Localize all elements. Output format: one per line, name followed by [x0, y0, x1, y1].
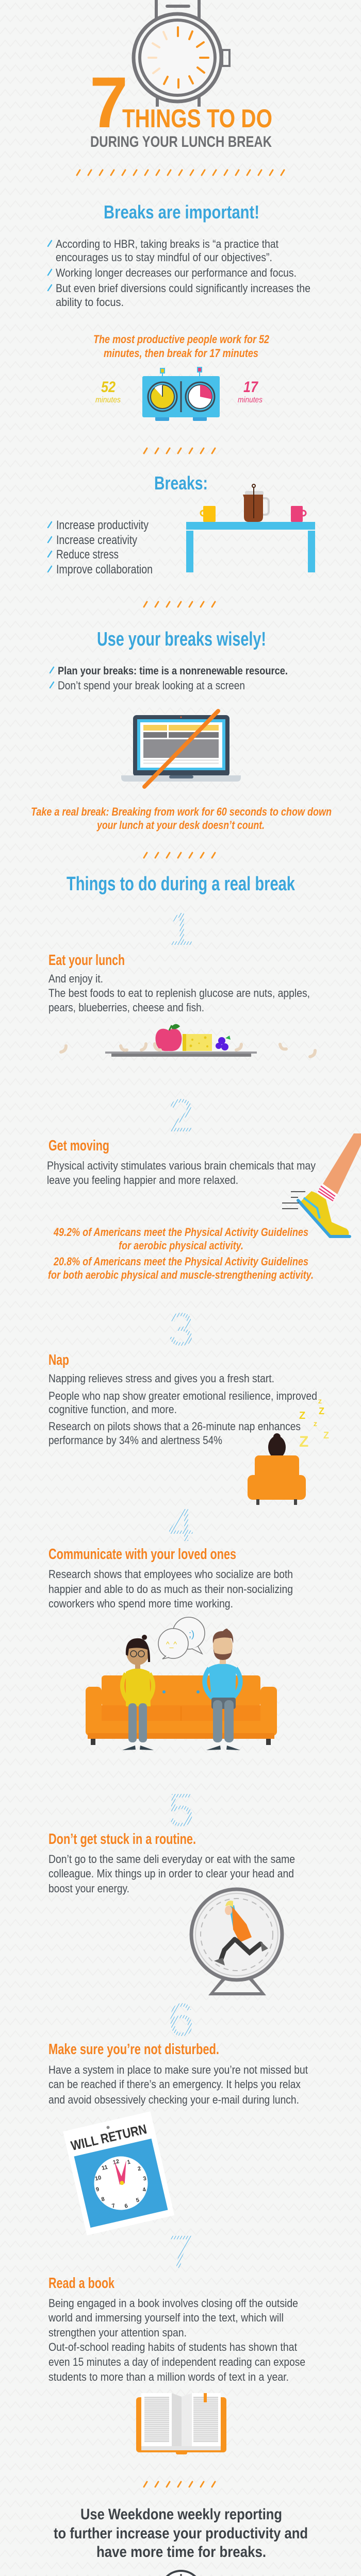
number 4: 4: [168, 1500, 194, 1551]
section 2: get moving: leave you feeling happier and more relaxed.: [47, 1174, 238, 1187]
closing message: [54, 2506, 308, 2561]
section 6: not disturbed: [48, 2041, 308, 2106]
icon: chess clock with 52 and 17: minutes: [95, 396, 121, 404]
illustration: two people on couch: ;): [189, 1629, 194, 1639]
section 7: read a book: students to more than a million words of text in a year.: [48, 2370, 289, 2383]
speech bubbles: [173, 1617, 205, 1649]
section 7: read a book: even 15 minutes a day of independent reading can expose: [48, 2355, 305, 2368]
section 1: eat your lunch: And enjoy it.: [48, 972, 103, 985]
callout: physical activity stats: for aerobic physical activity.: [119, 1239, 243, 1252]
number 1: 1: [168, 904, 194, 955]
bullet list: benefits: Improve collaboration: [56, 563, 153, 577]
section 5: routine: Don’t go to the same deli everyday or eat with the same: [48, 1853, 295, 1866]
callout: 52/17 minutes: minutes, then break for 17 minutes: [104, 347, 258, 360]
heading: Breaks are important: Breaks are important!: [104, 201, 259, 223]
section 7: read a book: Out-of-school reading habits of students has shown that: [48, 2341, 297, 2353]
icon: will return sign: 2: [137, 2165, 142, 2172]
icon: will return sign: 8: [101, 2196, 105, 2203]
section 7: read a book: strengthen your attention span.: [48, 2326, 187, 2339]
callout: 52/17 minutes: The most productive people work for 52: [93, 333, 270, 346]
section 5: routine: boost your energy.: [48, 1882, 129, 1895]
number 5: 5: [168, 1785, 194, 1836]
section 3: nap: Nap: [48, 1352, 69, 1368]
illustration: two people on couch: [86, 1617, 277, 1750]
icon: open book: [136, 2393, 226, 2454]
icon: running leg: [282, 1133, 361, 1236]
illustration: two people on couch: ^_^: [166, 1640, 177, 1648]
section 1: eat your lunch: pears, blueberries, cheese and fish.: [48, 1001, 204, 1014]
icon: will return sign: 4: [142, 2187, 147, 2193]
divider slashes: [144, 853, 215, 858]
icon: watch: [134, 0, 229, 107]
bullet list: breaks facts: ability to focus.: [56, 296, 124, 309]
icon: wall clock: [160, 2571, 202, 2576]
callout: take a real break: [31, 805, 332, 832]
woman: [126, 1668, 151, 1706]
icon: chess clock with 52 and 17: 52: [101, 379, 116, 396]
callout: physical activity stats: 20.8% of Americans meet the Physical Activity Guidelines: [53, 1255, 308, 1268]
section 3: nap: Napping relieves stress and gives you a fresh start.: [48, 1372, 274, 1385]
heading: Breaks: Breaks:: [154, 472, 208, 494]
icon: napping person in armchair: Z: [323, 1430, 329, 1440]
title: THINGS TO DO: [122, 104, 272, 133]
icon: will return sign: WILL RETURN: [69, 2121, 148, 2154]
divider slashes: [144, 2482, 215, 2487]
callout: physical activity stats: [48, 1226, 314, 1281]
man: [209, 1664, 236, 1700]
section 1: eat your lunch: [48, 952, 310, 1014]
icon: will return sign: 3: [142, 2175, 147, 2182]
section 4: communicate: Communicate with your loved ones: [48, 1546, 236, 1563]
bullet list: breaks facts: Working longer decreases our performance and focus.: [56, 266, 297, 279]
title: 7: [90, 62, 128, 143]
icon: will return sign: 9: [95, 2186, 100, 2193]
bullet list: breaks facts: [48, 238, 310, 309]
section 7: read a book: Being engaged in a book involves closing off the outside: [48, 2297, 298, 2310]
section 2: get moving: [47, 1138, 316, 1187]
number 6: 6: [168, 1994, 194, 2046]
bullet list: breaks facts: encourages us to stay mindful of our objectives”.: [56, 251, 272, 264]
icon: napping person in armchair: Z: [318, 1399, 322, 1405]
icon: table with mugs and coffee pot: [186, 484, 315, 572]
section 6: not disturbed: Make sure you’re not disturbed.: [48, 2041, 219, 2058]
section 5: routine: [48, 1831, 295, 1895]
bullet list: breaks facts: According to HBR, taking breaks is “a practice that: [56, 238, 278, 250]
icon: will return sign: 12: [112, 2158, 120, 2166]
section 4: communicate: [48, 1546, 293, 1610]
icon: napping person in armchair: [248, 1399, 329, 1505]
closing message: Use Weekdone weekly reporting: [80, 2506, 282, 2523]
bullet list: benefits: Increase productivity: [56, 518, 149, 532]
bullet list: wise breaks: [50, 665, 288, 692]
number 7: 7: [168, 2227, 194, 2278]
section 5: routine: colleague. Mix things up in order to clear your head and: [48, 1867, 294, 1880]
section 7: read a book: world and immersing yourself into the text, which will: [48, 2311, 284, 2324]
section 5: routine: Don’t get stuck in a routine.: [48, 1831, 196, 1848]
bullet list: breaks facts: But even brief diversions could significantly increases the: [56, 282, 310, 295]
bullet list: wise breaks: Plan your breaks: time is a nonrenewable resource.: [58, 665, 288, 677]
section 7: read a book: Read a book: [48, 2275, 115, 2292]
icon: will return sign: [63, 2111, 174, 2235]
icon: will return sign: 11: [101, 2164, 108, 2172]
icon: hamster wheel runner: [191, 1889, 282, 1995]
section 3: nap: Research on pilots shows that a 26-minute nap enhances: [48, 1420, 301, 1433]
section 6: not disturbed: can be reached if there’s an emergency. It helps you relax: [48, 2078, 301, 2091]
section 3: nap: cognitive function, and more.: [48, 1403, 177, 1416]
icon: will return sign: 5: [136, 2197, 140, 2204]
icon: chess clock with 52 and 17: minutes: [238, 396, 262, 404]
icon: will return sign: 6: [124, 2203, 128, 2210]
icon: napping person in armchair: Z: [299, 1410, 305, 1421]
section 1: eat your lunch: Eat your lunch: [48, 952, 125, 969]
icon: will return sign: 7: [111, 2202, 116, 2209]
closing message: to further increase your productivity and: [54, 2525, 308, 2542]
icon: chess clock with 52 and 17: [95, 367, 262, 421]
bullet list: wise breaks: Don’t spend your break looking at a screen: [58, 679, 245, 692]
number 2: 2: [168, 1090, 194, 1142]
section 4: communicate: happier and able to do as much as their non-socializing: [48, 1583, 293, 1596]
icon: chess clock with 52 and 17: 17: [243, 379, 258, 396]
heading: Use your breaks wisely: Use your breaks wisely!: [97, 629, 266, 650]
section 2: get moving: Get moving: [48, 1138, 109, 1154]
divider slashes: [144, 448, 215, 453]
section 6: not disturbed: and avoid obsessively checking your e-mail during lunch.: [48, 2093, 299, 2106]
icon: crossed-out laptop: [121, 711, 241, 787]
bullet list: benefits: Increase creativity: [56, 533, 137, 547]
title: [90, 62, 272, 150]
heading: Things to do during a real break: Things to do during a real break: [67, 873, 296, 895]
section 4: communicate: coworkers who spend more time working.: [48, 1597, 233, 1610]
icon: food tray: [61, 1025, 315, 1057]
section 6: not disturbed: Have a system in place to make sure you’re not missed but: [48, 2063, 308, 2076]
section 3: nap: performance by 34% and alertness 54%: [48, 1434, 222, 1447]
section 3: nap: People who nap show greater emotional resilience, improved: [48, 1389, 317, 1402]
closing message: have more time for breaks.: [96, 2544, 266, 2561]
bullet list: benefits: Reduce stress: [56, 548, 119, 562]
icon: napping person in armchair: Z: [299, 1433, 308, 1450]
callout: take a real break: your lunch at your desk doesn’t count.: [96, 819, 265, 832]
divider slashes: [144, 602, 215, 607]
section 1: eat your lunch: The best foods to eat to replenish glucose are nuts, apples,: [48, 987, 310, 999]
callout: physical activity stats: 49.2% of Americans meet the Physical Activity Guidelines: [53, 1226, 308, 1239]
icon: napping person in armchair: Z: [319, 1406, 324, 1416]
number 3: 3: [168, 1304, 194, 1355]
icon: will return sign: 10: [94, 2175, 102, 2182]
callout: 52/17 minutes: [93, 333, 270, 360]
section 3: nap: [48, 1352, 317, 1447]
icon: napping person in armchair: Z: [314, 1421, 317, 1428]
section 7: read a book: [48, 2275, 305, 2383]
section 4: communicate: Research shows that employees who socialize are both: [48, 1568, 293, 1581]
icon: will return sign: 1: [126, 2159, 131, 2166]
section 2: get moving: Physical activity stimulates various brain chemicals that may: [47, 1159, 316, 1172]
title: DURING YOUR LUNCH BREAK: [90, 133, 272, 150]
divider slashes: [77, 170, 284, 175]
bullet list: benefits: [48, 518, 153, 577]
